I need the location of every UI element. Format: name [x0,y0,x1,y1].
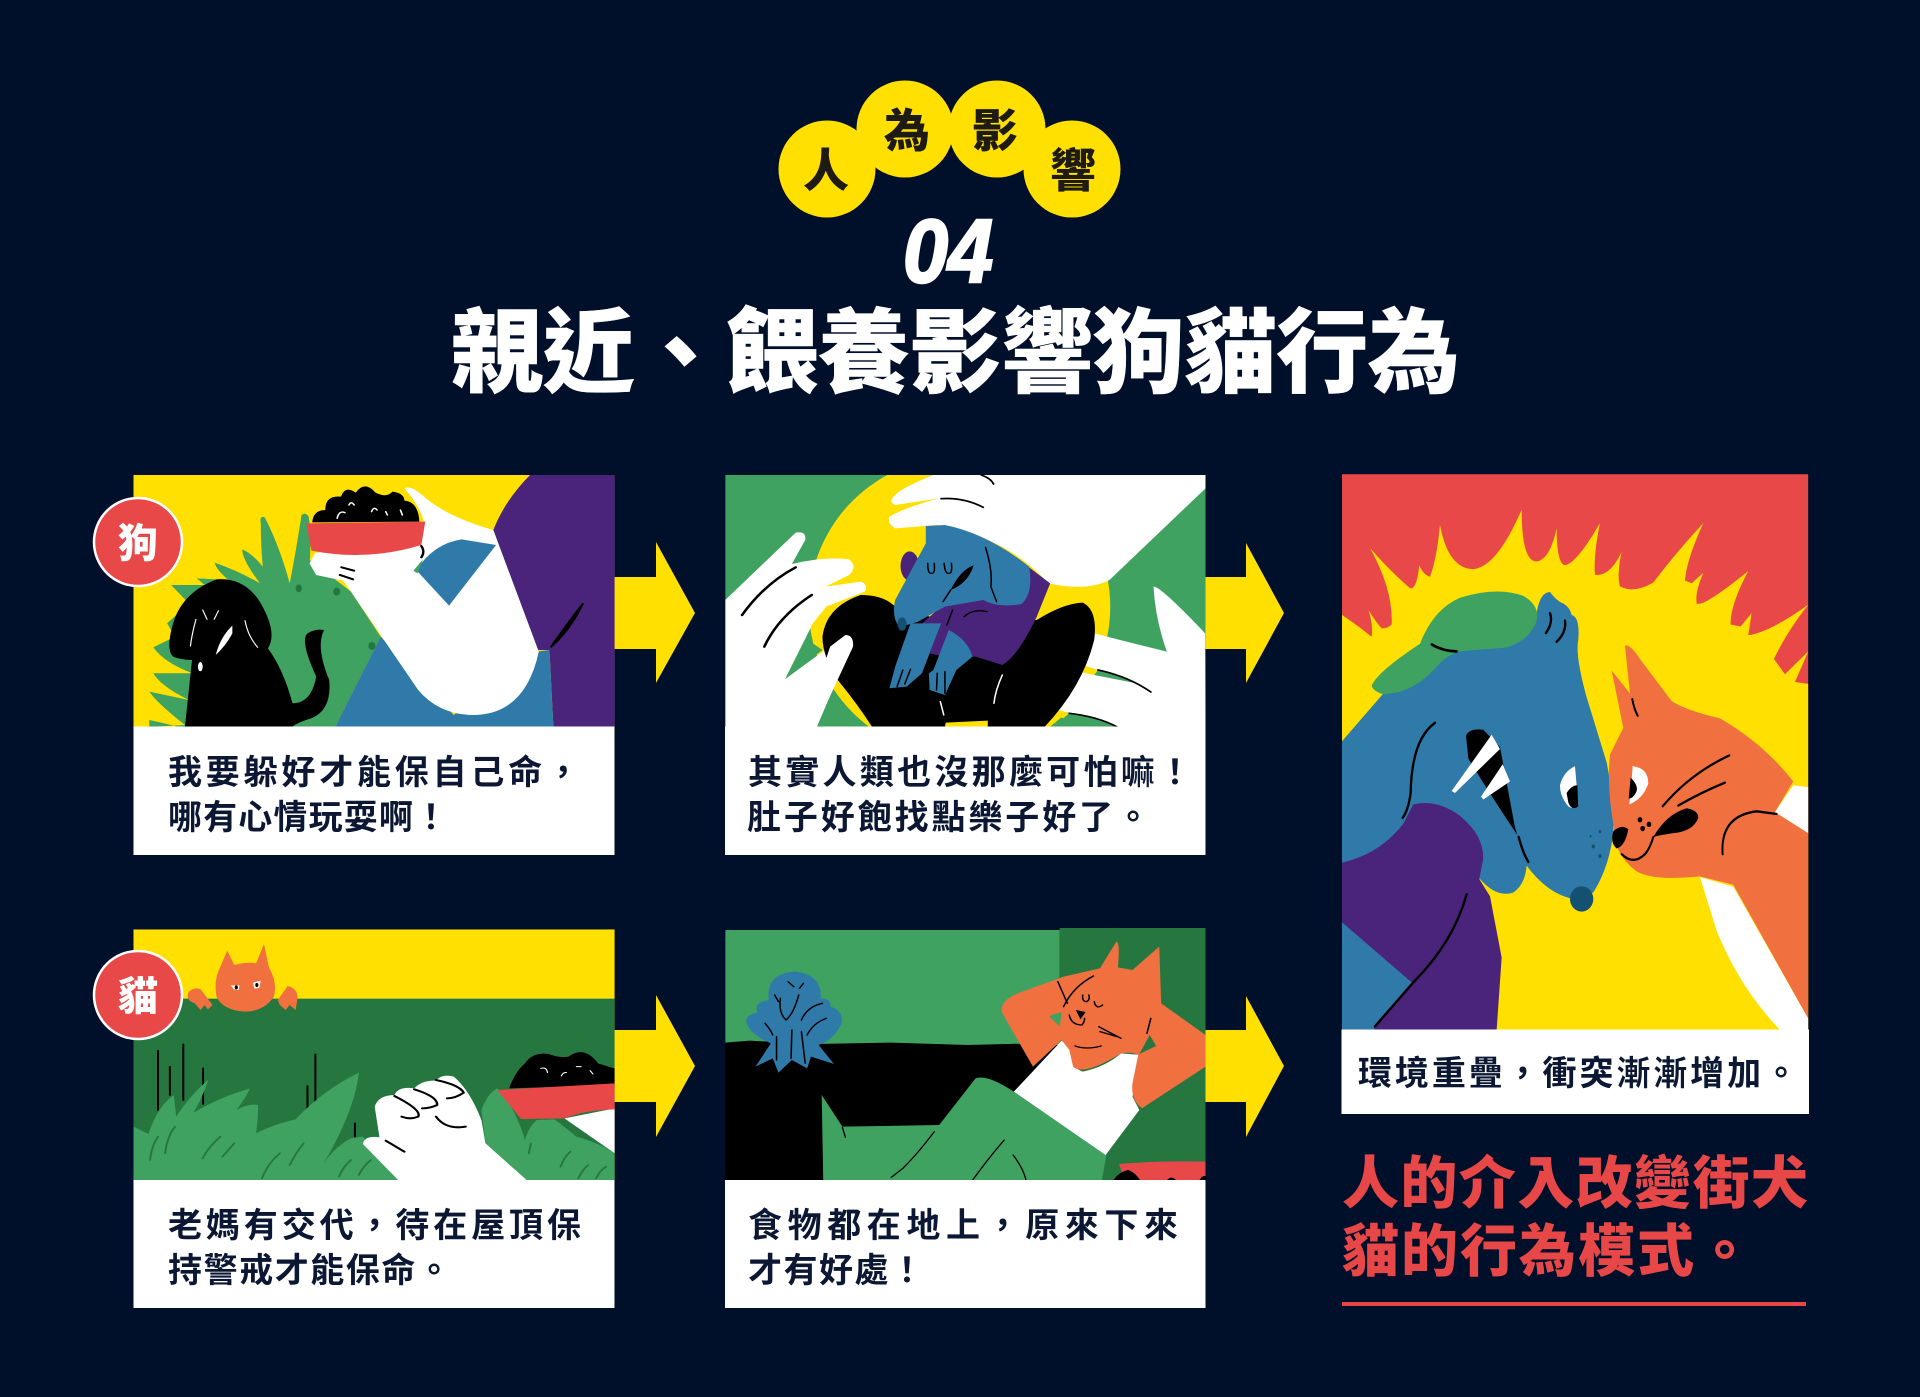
bubble: 人: 人 [803,145,849,197]
caption: 才有好處！ [748,1252,924,1290]
illustration: blue dog in lap with white hands [725,475,1206,726]
bubble: 響: 響 [1050,145,1096,197]
bubble: 為 [856,80,954,178]
bubble: 人 [778,120,876,218]
conclusion text: 貓的行為模式。 [1342,1220,1753,1284]
caption [725,1180,1206,1308]
caption: 我要躲好才能保自己命， [168,754,580,792]
conclusion text [1342,1152,1808,1284]
title: 親近、餵養影響狗貓行為 [451,303,1460,405]
panel: dog and cat face to face [1342,474,1809,1114]
caption: 肚子好飽找點樂子好了。 [747,799,1150,837]
bubble: 為: 為 [884,105,930,157]
section number 04: 04 [903,201,993,302]
bubble: 影 [948,80,1046,178]
caption: 環境重疊，衝突漸漸增加。 [1358,1055,1798,1093]
panel: dog hiding from human with food [133,475,615,855]
underline [1342,1302,1806,1306]
illustration: dog, plant and human holding bowl [133,475,615,727]
arrow: panel 1 to panel 2 [614,542,695,683]
caption: 持警戒才能保命。 [168,1252,451,1290]
badge: 貓 [94,951,182,1039]
caption: 老媽有交代，待在屋頂保 [168,1207,581,1245]
illustration: blue dog and orange cat with yellow burst [1342,474,1808,1030]
caption [725,726,1206,855]
bubble: 影: 影 [972,105,1018,157]
conclusion text: 人的介入改變街犬 [1342,1152,1808,1216]
panel: cat watching from roof [133,929,615,1308]
illustration: blue dog resting, cat lounging with arms behind head [725,928,1206,1180]
caption: 食物都在地上，原來下來 [748,1207,1178,1245]
caption: 哪有心情玩耍啊！ [168,799,448,837]
panel: dog being petted by human hands [725,457,1206,855]
arrow: panel 3 to panel 4 [614,995,695,1137]
badge: 狗: 狗 [118,522,158,566]
illustration: orange cat on roof, grass, hand and food bowl [133,929,615,1180]
badge: 狗 [94,498,182,586]
caption [1342,1030,1809,1114]
bubble: 響 [1024,120,1120,218]
arrow: panel 2 to panel 5 [1205,543,1284,683]
badge: 貓: 貓 [118,975,158,1019]
panel: relaxed cat on the ground [725,928,1206,1308]
caption: 其實人類也沒那麼可怕嘛！ [748,754,1192,792]
arrow: panel 4 to panel 5 [1205,996,1284,1137]
caption [134,1180,614,1308]
header: series badge bubbles [778,80,1120,218]
caption [134,726,614,855]
